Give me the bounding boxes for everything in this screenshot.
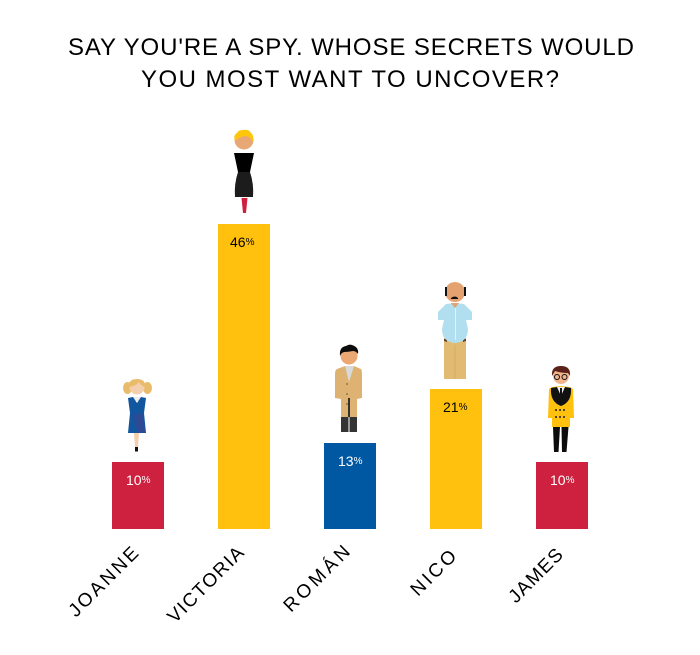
bar: Joanne 10%: 10 bbox=[126, 472, 142, 488]
bar: Nico 21%: 21 bbox=[443, 399, 459, 415]
bar: Román 13%: % bbox=[354, 456, 363, 467]
icon: Victoria figure bbox=[234, 130, 254, 213]
bar: Victoria 46%: % bbox=[246, 237, 255, 248]
bar: Victoria 46% bbox=[218, 224, 270, 529]
label: James: JAMES bbox=[505, 545, 568, 608]
bar: Nico 21% bbox=[430, 389, 482, 529]
label: Joanne: JOANNE bbox=[65, 543, 143, 622]
label: Nico: NICO bbox=[407, 546, 461, 601]
title bbox=[68, 34, 634, 93]
bar: James 10%: % bbox=[566, 475, 575, 486]
label: Román: ROMÁN bbox=[280, 542, 355, 617]
bar: James 10%: 10 bbox=[550, 472, 566, 488]
icon: Joanne figure bbox=[123, 379, 152, 452]
icon: James figure bbox=[548, 366, 574, 452]
icon: Nico figure bbox=[438, 282, 472, 379]
bar: Joanne 10%: % bbox=[142, 475, 151, 486]
label: Victoria: VICTORIA bbox=[164, 542, 249, 628]
title: YOU MOST WANT TO UNCOVER? bbox=[141, 66, 559, 93]
icon: Román figure bbox=[335, 345, 362, 432]
bar: Victoria 46%: 46 bbox=[230, 234, 246, 250]
bar: James 10% bbox=[536, 462, 588, 529]
bar: Román 13%: 13 bbox=[338, 453, 354, 469]
bar: Joanne 10% bbox=[112, 462, 164, 529]
bar: Nico 21%: % bbox=[459, 402, 468, 413]
bar: Román 13% bbox=[324, 443, 376, 529]
title: SAY YOU'RE A SPY. WHOSE SECRETS WOULD bbox=[68, 34, 634, 61]
